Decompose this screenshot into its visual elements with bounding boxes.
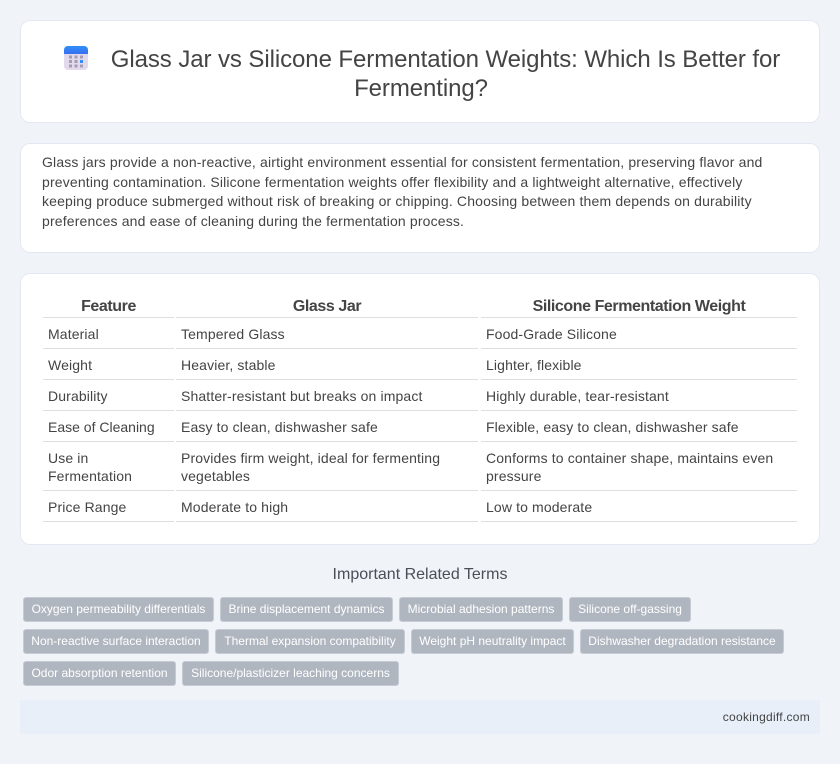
- row: durability: Shatter-resistant but breaks on impact: [181, 388, 422, 404]
- row: material: [48, 326, 617, 342]
- row: price range: Price Range: [48, 499, 126, 515]
- icon: calendar: [64, 46, 88, 70]
- tags: related terms: Non-reactive surface interaction: [31, 634, 201, 648]
- panel: comparison table: [20, 273, 820, 545]
- tags: related terms: Microbial adhesion patterns: [408, 602, 554, 616]
- row: use in fermentation: [48, 450, 773, 484]
- row: use in fermentation: vegetables: [181, 468, 250, 484]
- row: weight: Weight: [48, 357, 92, 373]
- row: use in fermentation: Fermentation: [48, 468, 132, 484]
- tags: related terms: Weight pH neutrality impact: [419, 634, 566, 648]
- title: [111, 46, 780, 102]
- footer: [20, 700, 820, 734]
- table header: [81, 298, 746, 315]
- row: weight: Lighter, flexible: [486, 357, 582, 373]
- row: use in fermentation: Use in: [48, 450, 88, 466]
- row: price range: Moderate to high: [181, 499, 288, 515]
- tags: related terms: [23, 597, 784, 686]
- row: price range: Low to moderate: [486, 499, 592, 515]
- row: material: Material: [48, 326, 99, 342]
- row: ease of cleaning: Easy to clean, dishwasher safe: [181, 419, 378, 435]
- row: material: Food-Grade Silicone: [486, 326, 617, 342]
- heading: related terms: Important Related Terms: [333, 566, 507, 583]
- row: durability: [48, 388, 669, 404]
- row: use in fermentation: pressure: [486, 468, 542, 484]
- row: durability: Durability: [48, 388, 108, 404]
- panel: summary card: [20, 143, 820, 253]
- row: price range: [48, 499, 592, 515]
- row: ease of cleaning: Flexible, easy to clean, dishwasher safe: [486, 419, 739, 435]
- row: material: Tempered Glass: [181, 326, 285, 342]
- text block: summary: preventing contamination. Silicone fermentation weights offer flexibility and a lightweight alternative, effectively: [42, 174, 743, 190]
- text block: summary: keeping produce submerged without risk of breaking or chipping. Choosing between them depends on durability: [42, 193, 752, 209]
- row: weight: [48, 357, 582, 373]
- text block: summary: [42, 154, 762, 229]
- table header: Silicone Fermentation Weight: [533, 298, 745, 315]
- text block: summary: Glass jars provide a non-reactive, airtight environment essential for consistent fermentation, preserving flavor and: [42, 154, 762, 170]
- row: use in fermentation: Conforms to container shape, maintains even: [486, 450, 773, 466]
- text block: summary: preferences and ease of cleaning during the fermentation process.: [42, 213, 464, 229]
- tags: related terms: Oxygen permeability differentials: [32, 602, 205, 616]
- row: ease of cleaning: [48, 419, 739, 435]
- table header: Feature: [81, 298, 136, 315]
- row: ease of cleaning: Ease of Cleaning: [48, 419, 155, 435]
- row: durability: Highly durable, tear-resistant: [486, 388, 669, 404]
- table header: Glass Jar: [293, 298, 361, 315]
- tags: related terms: Brine displacement dynamics: [228, 602, 385, 616]
- tags: related terms: Silicone/plasticizer leaching concerns: [191, 666, 390, 680]
- title: Glass Jar vs Silicone Fermentation Weights: Which Is Better for: [111, 46, 780, 73]
- tags: related terms: Dishwasher degradation resistance: [588, 634, 776, 648]
- tags: related terms: Odor absorption retention: [31, 666, 168, 680]
- tags: related terms: Thermal expansion compatibility: [224, 634, 396, 648]
- footer source: cookingdiff.com: [723, 710, 810, 724]
- row: weight: Heavier, stable: [181, 357, 276, 373]
- panel: title card: [20, 20, 820, 123]
- title: Fermenting?: [354, 75, 488, 102]
- tags: related terms: Silicone off-gassing: [578, 602, 682, 616]
- row: use in fermentation: Provides firm weight, ideal for fermenting: [181, 450, 440, 466]
